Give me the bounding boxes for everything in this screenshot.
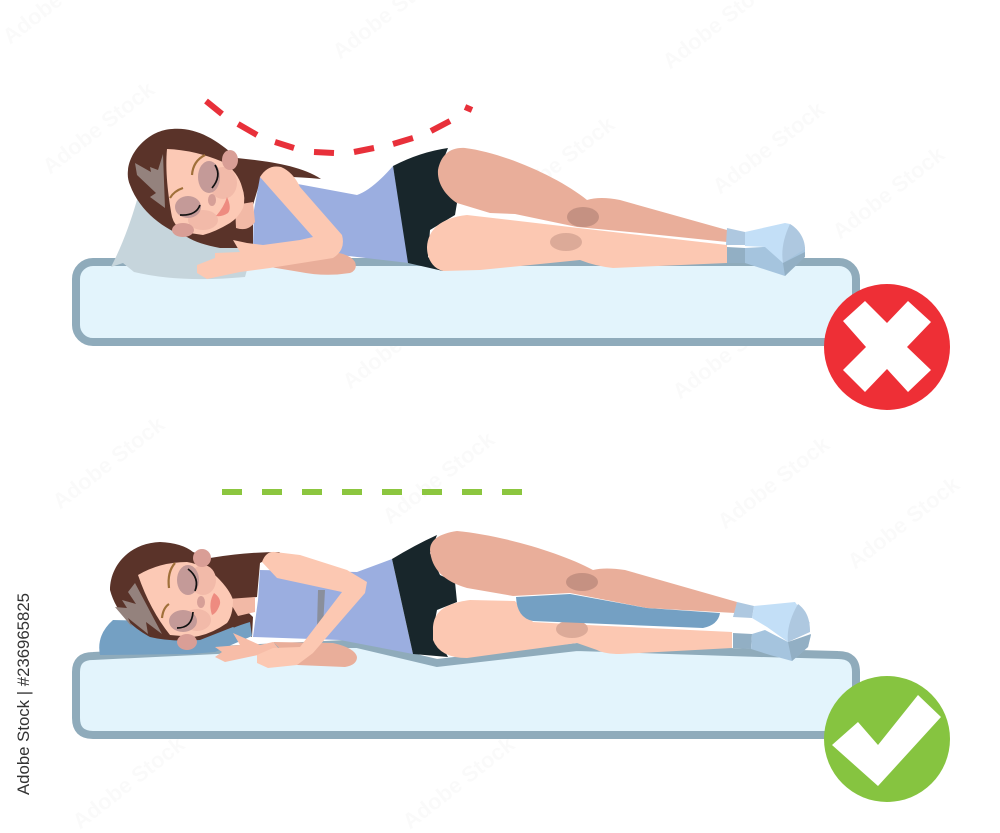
ears <box>177 549 211 650</box>
hair highlight <box>115 583 162 634</box>
sock upper <box>726 223 805 263</box>
face <box>166 149 244 235</box>
upper arm and front hand <box>257 552 367 668</box>
watermark text: Adobe Stock <box>398 731 520 833</box>
lower knee mark <box>556 620 588 638</box>
upper knee mark <box>567 207 599 227</box>
panel: incorrect sleeping posture <box>76 101 950 410</box>
upper arm and hand <box>197 166 343 279</box>
upper leg far <box>430 531 737 613</box>
blue knee pillow <box>516 594 720 628</box>
watermark text: Adobe Stock <box>48 411 170 514</box>
eyebrows <box>162 563 175 618</box>
face <box>138 562 233 637</box>
tank top <box>253 166 409 263</box>
lower knee mark <box>550 233 582 251</box>
sock lower <box>733 630 811 661</box>
under arm forearm <box>273 642 357 667</box>
stock id side label: Adobe Stock | #236965825 <box>15 593 33 795</box>
supportive mattress with dent <box>76 644 856 735</box>
sock upper <box>733 602 810 642</box>
watermark text: Adobe Stock <box>708 96 830 199</box>
eye shadows <box>175 161 220 218</box>
ears <box>172 150 238 237</box>
watermark text: Adobe Stock <box>843 471 965 574</box>
watermark text: Adobe Stock <box>68 731 190 833</box>
curved red dashed spine line <box>206 101 472 153</box>
tank shadow <box>317 590 325 627</box>
watermark text: Adobe Stock <box>38 76 160 179</box>
contour blue head pillow <box>99 620 252 655</box>
lips <box>210 593 220 615</box>
tank top <box>253 559 413 654</box>
hair back <box>128 129 321 248</box>
neck <box>228 597 255 616</box>
nose <box>197 596 205 608</box>
upper knee mark <box>566 573 598 591</box>
watermark text: Adobe Stock <box>498 111 620 214</box>
shorts <box>392 535 457 657</box>
watermark text: Adobe Stock <box>828 141 950 244</box>
panel: correct sleeping posture <box>76 489 950 802</box>
lower leg near <box>427 215 727 271</box>
cheeks <box>188 167 237 230</box>
watermark text: Adobe Stock <box>338 291 460 394</box>
eye shadows <box>169 565 199 632</box>
watermark text: Adobe Stock <box>378 426 500 529</box>
red cross badge <box>824 284 950 410</box>
eyelashes <box>180 165 218 215</box>
cheeks <box>183 565 216 631</box>
neck <box>235 202 255 229</box>
sock lower <box>727 246 805 276</box>
green check badge <box>824 676 950 802</box>
nose <box>208 194 216 206</box>
pillow front fold <box>190 622 252 654</box>
flat grey pillow <box>111 200 254 279</box>
watermark text: Adobe Stock <box>713 431 835 534</box>
under arm forearm <box>270 252 356 275</box>
sleeping woman, no support <box>128 129 805 279</box>
shorts <box>393 148 457 271</box>
lips <box>216 197 230 216</box>
lower leg near <box>433 600 732 658</box>
back hand <box>215 633 280 662</box>
watermark text: Adobe Stock <box>668 301 790 404</box>
eyebrows <box>170 155 205 198</box>
hair highlight <box>135 154 165 208</box>
straight green dashed spine line <box>222 489 522 495</box>
soft mattress <box>76 262 856 342</box>
hair back <box>110 542 280 641</box>
eyelashes <box>177 569 196 628</box>
upper leg far <box>438 148 727 242</box>
sleeping woman, supported <box>110 531 811 668</box>
